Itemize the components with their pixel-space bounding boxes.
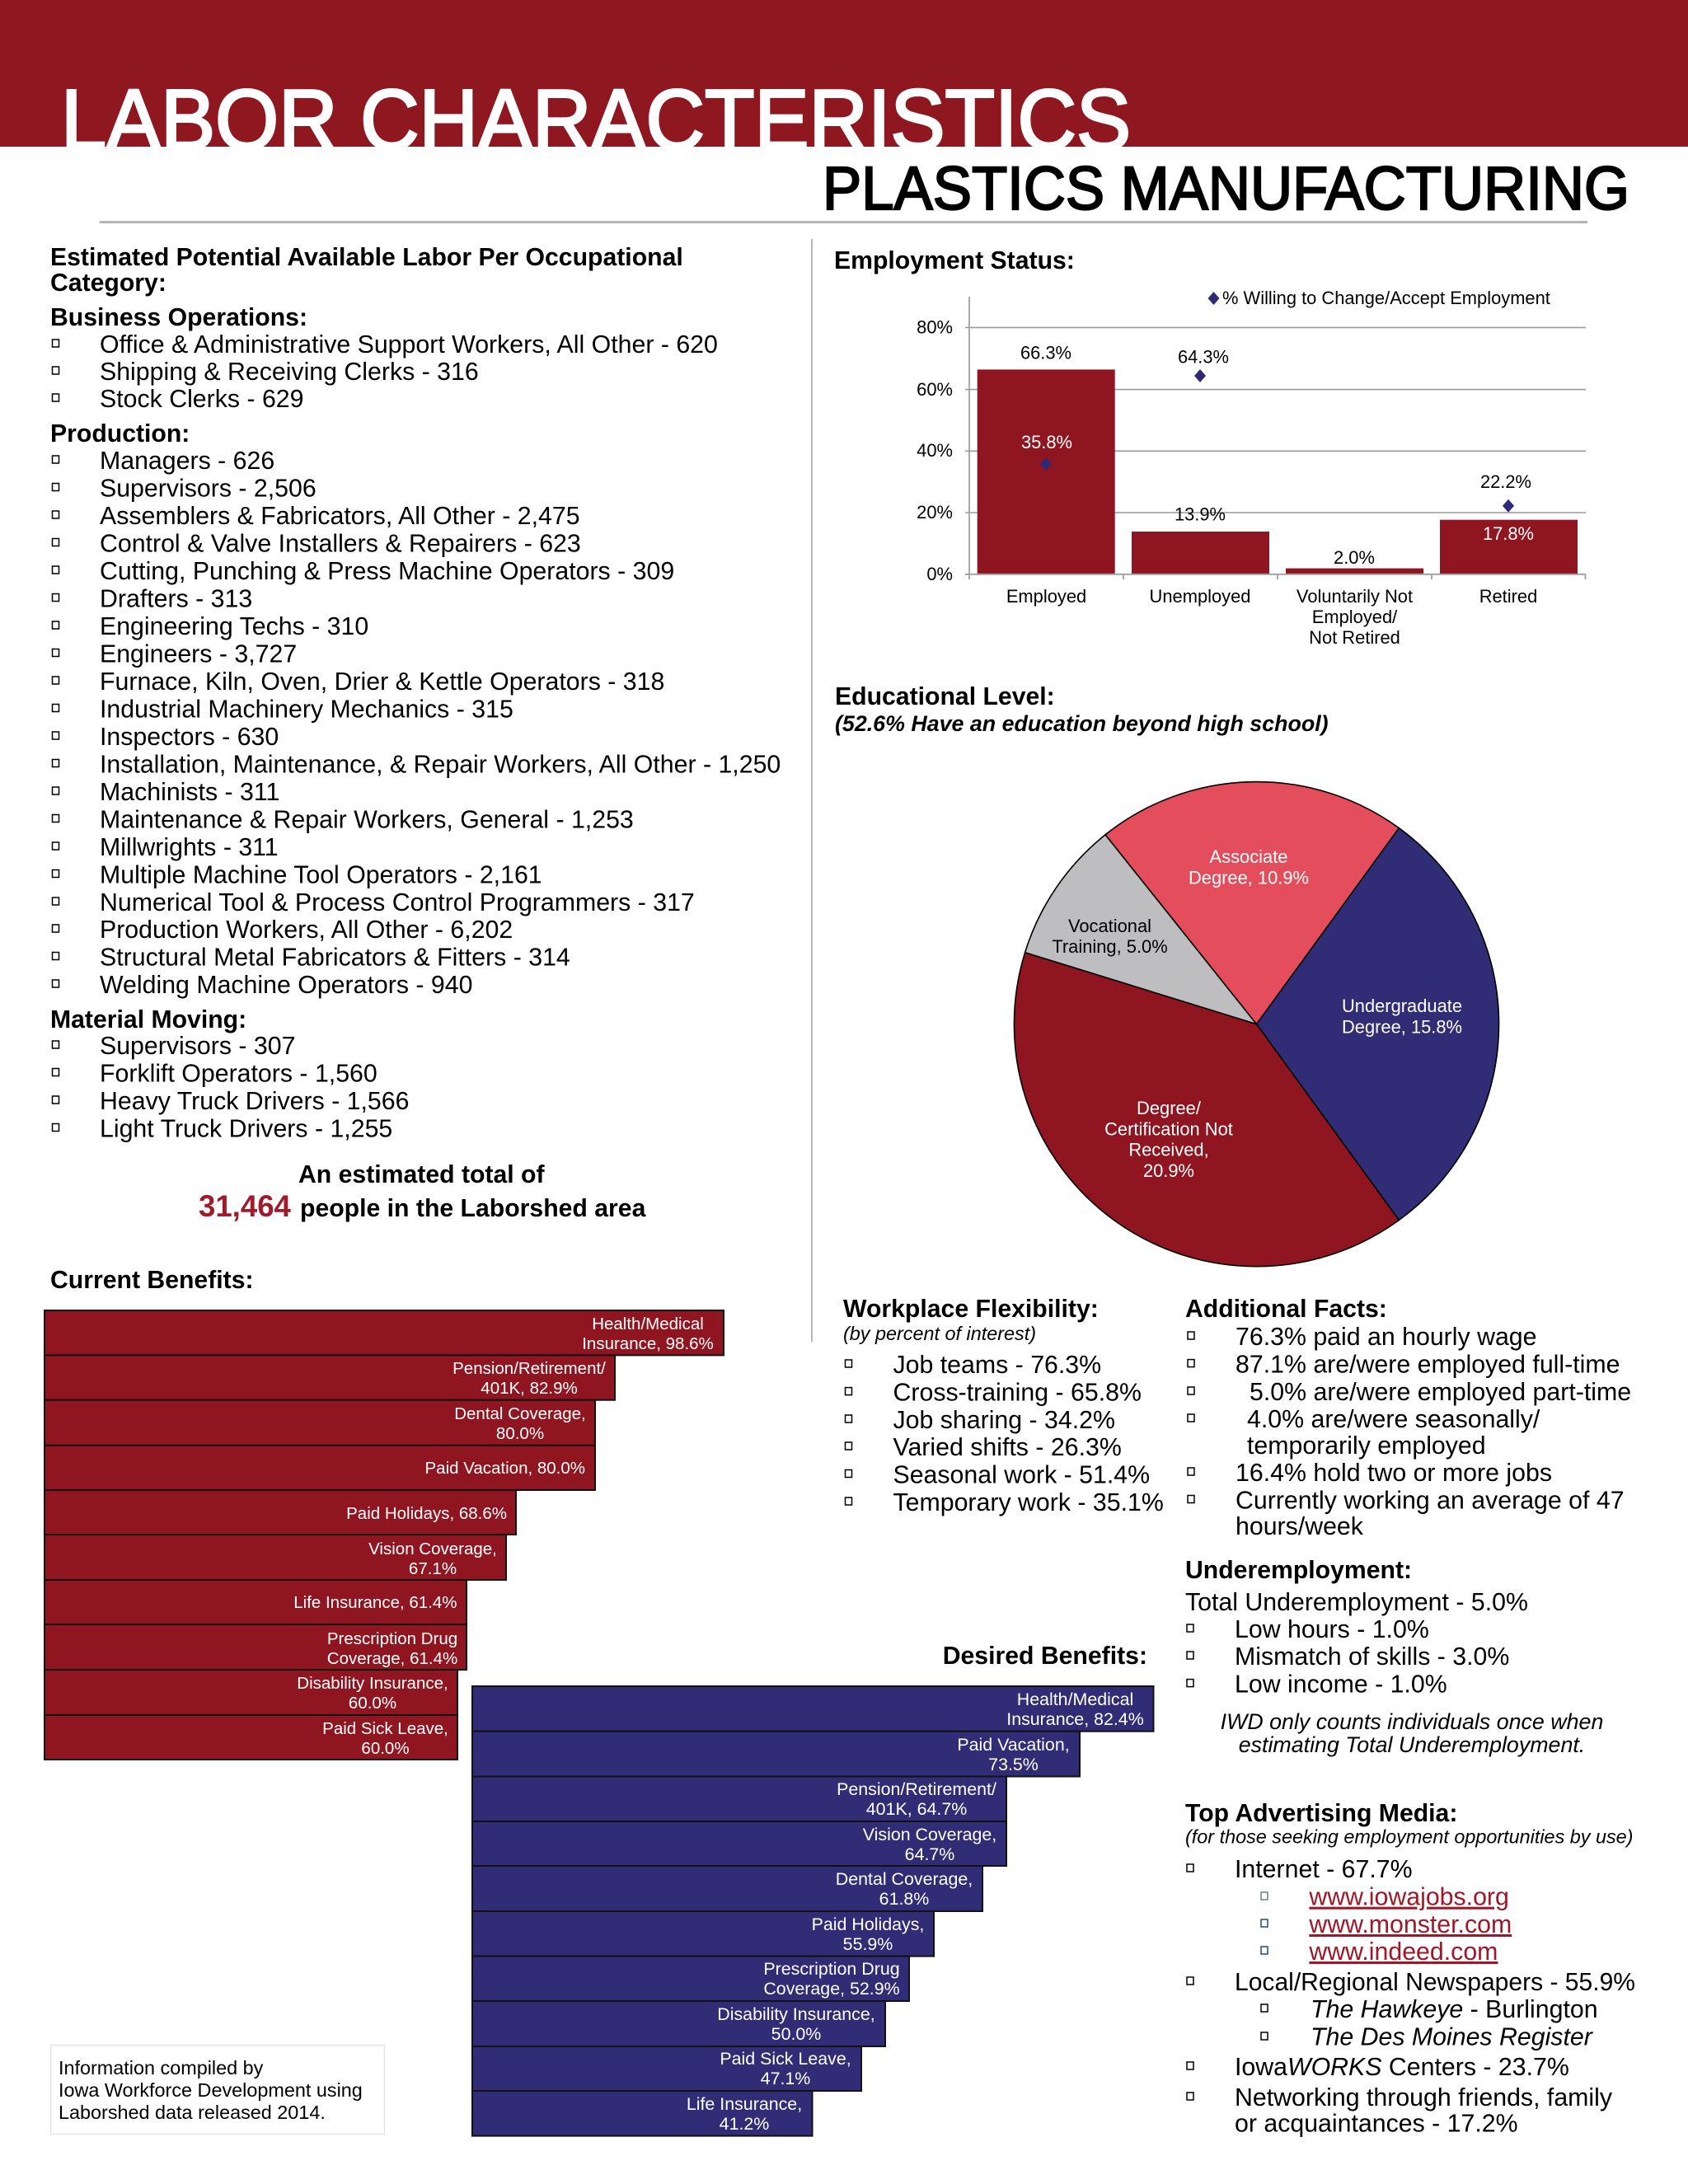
list: flexibility: Job teams - 76.3% [893,1352,1101,1379]
bar labels: Paid Sick Leave, [322,1719,448,1738]
list: flexibility: Seasonal work - 51.4% [893,1462,1150,1488]
list: production: Installation, Maintenance, & Repair Workers, All Other - 1,250 [100,752,781,778]
header band [0,0,1688,147]
bar labels: Insurance, 98.6% [582,1334,714,1353]
list: flexibility: Job sharing - 34.2% [893,1407,1115,1434]
list: underemployment: Total Underemployment - 5.0% [1185,1589,1528,1616]
y axis labels: 20% [917,502,953,523]
list: additional facts: 76.3% paid an hourly wage [1236,1324,1537,1351]
y axis labels [917,316,953,584]
y axis labels: 80% [917,316,953,338]
heading: production: Production: [50,420,190,448]
panel: workplace flexibility [843,1296,1164,1516]
y axis labels: 60% [917,379,953,400]
list: production: Assemblers & Fabricators, All Other - 2,475 [100,503,580,530]
heading: underemployment: Underemployment: [1185,1557,1412,1584]
list: media: www.iowajobs.org [1308,1884,1509,1911]
list: business operations: Office & Administrative Support Workers, All Other - 620 [100,331,718,359]
heading: educational level: Educational Level: [835,683,1055,710]
y axis labels: 40% [917,440,953,461]
value labels: 2.0% [1334,547,1375,568]
list: production: Production Workers, All Other - 6,202 [100,916,513,944]
bar labels: 60.0% [349,1694,396,1713]
bars [978,369,1578,574]
list: production: Structural Metal Fabricators & Fitters - 314 [100,944,570,971]
value labels: 64.3% [1178,346,1229,368]
list: flexibility: Temporary work - 35.1% [893,1489,1164,1516]
pie labels: Degree, 10.9% [1189,868,1309,888]
list: additional facts: hours/week [1236,1513,1364,1540]
pie labels: Certification Not [1104,1118,1233,1139]
list: production: Supervisors - 2,506 [100,475,316,503]
category labels: Voluntarily Not [1296,586,1413,607]
y axis labels: 0% [926,564,953,584]
bar labels: 50.0% [771,2024,821,2044]
axes [965,297,1586,579]
list: production: Engineers - 3,727 [100,641,297,668]
list: media: Internet - 67.7% [1235,1856,1413,1883]
bar labels: Health/Medical [592,1315,704,1333]
list: production [53,448,781,999]
pie labels [1052,846,1462,1181]
bar labels: 401K, 64.7% [866,1799,967,1819]
panel: top advertising media [1185,1800,1635,2138]
list: production: Engineering Techs - 310 [100,613,368,640]
heading: estimated potential available labor: Estimated Potential Available Labor Per Occupational [50,244,683,271]
subtitle: Plastics Manufacturing: PLASTICS MANUFACTURING [823,154,1629,223]
list: underemployment: Low income - 1.0% [1235,1671,1447,1699]
pie labels: Vocational [1068,916,1151,936]
category labels: Employed [1006,586,1086,607]
list: production: Inspectors - 630 [100,724,279,751]
bar labels: 80.0% [496,1424,544,1443]
list: additional facts: 16.4% hold two or more jobs [1236,1460,1552,1487]
bar labels: Disability Insurance, [297,1674,448,1693]
heading: workplace flexibility: Workplace Flexibility: [843,1296,1099,1323]
list: production: Managers - 626 [100,448,274,475]
category labels: Retired [1479,586,1537,607]
bar labels: Coverage, 61.4% [327,1649,457,1668]
list: underemployment: Mismatch of skills - 3.0% [1235,1643,1509,1671]
bar labels: Pension/Retirement/ [452,1359,606,1378]
bar labels: 41.2% [720,2114,769,2134]
list: business operations: Shipping & Receiving Clerks - 316 [100,359,479,386]
list: production: Furnace, Kiln, Oven, Drier & Kettle Operators - 318 [100,668,664,696]
heading: top advertising media: Top Advertising Media: [1185,1800,1457,1827]
list: media [1187,1856,1635,2138]
value labels: 22.2% [1480,471,1531,492]
legend: % Willing to Change/Accept Employment [1222,288,1550,308]
list: underemployment [1185,1589,1528,1699]
bar labels [687,1690,1144,2134]
callout: estimated total: people in the Laborshed area [300,1195,646,1222]
pie labels: Associate [1210,846,1287,867]
panel: employment status [834,247,1586,648]
panel: additional facts [1185,1296,1631,1540]
list: material moving: Forklift Operators - 1,560 [100,1060,377,1088]
list: underemployment: Low hours - 1.0% [1235,1616,1429,1643]
bar labels: Paid Vacation, [957,1735,1070,1755]
list: business operations [53,331,718,413]
bar chart: employment status [917,288,1586,648]
bar labels: Dental Coverage, [836,1869,973,1889]
list: media: Networking through friends, family [1235,2084,1613,2111]
bar labels: Prescription Drug [763,1959,900,1979]
bar labels: Vision Coverage, [863,1825,996,1844]
list: additional facts: Currently working an average of 47 [1236,1487,1625,1515]
pie labels: Undergraduate [1342,996,1462,1016]
list: production: Multiple Machine Tool Operators - 2,161 [100,862,542,888]
source note box [51,2046,384,2135]
bar labels: Life Insurance, 61.4% [293,1593,457,1612]
value labels: 66.3% [1020,342,1071,363]
subheading: by percent of interest: (by percent of interest) [843,1323,1036,1344]
note: IWD counting [1221,1709,1603,1757]
heading: business operations: Business Operations: [50,304,307,331]
bar labels: 64.7% [905,1844,954,1864]
list: flexibility: Cross-training - 65.8% [893,1380,1142,1407]
list: production: Cutting, Punching & Press Machine Operators - 309 [100,558,674,585]
willingness diamonds [1040,369,1514,513]
value labels: 35.8% [1021,432,1072,452]
list: media: Local/Regional Newspapers - 55.9% [1235,1969,1635,1996]
source note box: Information compiled by [59,2057,264,2079]
bar labels: 73.5% [988,1755,1039,1774]
list: additional facts: 4.0% are/were seasonally/ [1247,1406,1540,1433]
pie labels: Degree/ [1137,1098,1202,1118]
list: flexibility: Varied shifts - 26.3% [893,1434,1122,1461]
list: material moving: Heavy Truck Drivers - 1,566 [100,1088,409,1115]
bar chart: current benefits [45,1310,724,1760]
title: Labor Characteristics: LABOR CHARACTERISTICS [61,73,1131,168]
pie labels: Received, [1128,1140,1209,1160]
list: media: IowaWORKS Centers - 23.7% [1235,2054,1569,2081]
list: business operations: Stock Clerks - 629 [100,386,304,413]
heading: current benefits: Current Benefits: [50,1267,254,1294]
bar labels: 67.1% [409,1559,457,1578]
bar labels: 55.9% [843,1934,893,1954]
list: production: Numerical Tool & Process Control Programmers - 317 [100,889,695,916]
heading: estimated potential available labor: Category: [50,269,166,297]
list: media: The Hawkeye - Burlington [1311,1996,1598,2023]
list: flexibility [846,1352,1164,1516]
callout: estimated total: An estimated total of [298,1161,545,1188]
panel: labor per occupational category [50,244,781,1223]
bar labels: Paid Holidays, [812,1915,924,1934]
bar labels [293,1315,714,1758]
list: media: or acquaintances - 17.2% [1235,2111,1518,2138]
category labels [1006,586,1537,648]
note: IWD counting: estimating Total Underemployment. [1239,1732,1585,1757]
bar labels: 61.8% [879,1889,929,1909]
pie labels: Degree, 15.8% [1342,1017,1462,1038]
list: media: The Des Moines Register [1311,2024,1594,2051]
pie chart: education [1014,782,1499,1267]
list: material moving: Light Truck Drivers - 1,255 [100,1116,392,1142]
bar labels: Pension/Retirement/ [837,1779,996,1799]
list: production: Millwrights - 311 [100,834,279,861]
list: additional facts: temporarily employed [1247,1432,1486,1460]
list: production: Machinists - 311 [100,779,279,806]
list: additional facts [1188,1324,1631,1540]
value labels: 17.8% [1483,523,1534,544]
bar labels: Prescription Drug [327,1629,457,1648]
source note box: Laborshed data released 2014. [59,2102,326,2123]
bar labels: Paid Sick Leave, [720,2049,851,2069]
heading: desired benefits: Desired Benefits: [943,1643,1147,1670]
subheading: media note: (for those seeking employment opportunities by use) [1185,1826,1633,1848]
subheading: education note: (52.6% Have an education beyond high school) [835,711,1329,736]
list: material moving: Supervisors - 307 [100,1033,295,1060]
list: additional facts: 5.0% are/were employed part-time [1250,1379,1631,1406]
value labels: 13.9% [1175,504,1226,524]
value labels [1020,342,1534,568]
list: production: Maintenance & Repair Workers, General - 1,253 [100,806,634,834]
bar labels: Life Insurance, [687,2094,802,2114]
category labels: Unemployed [1150,586,1250,607]
heading: employment status: Employment Status: [834,247,1075,274]
heading: estimated potential available labor [50,244,683,297]
note: IWD counting: IWD only counts individuals once when [1221,1709,1603,1734]
callout: estimated total [199,1161,646,1223]
panel: current benefits [45,1267,724,1760]
pie labels: Training, 5.0% [1052,936,1168,957]
panel: desired benefits [472,1643,1154,2136]
bar labels: Disability Insurance, [717,2004,875,2024]
bar labels: Dental Coverage, [454,1404,586,1423]
bar labels: Vision Coverage, [368,1540,497,1558]
bar labels: Paid Vacation, 80.0% [425,1459,585,1478]
panel: underemployment [1185,1557,1603,1757]
bar labels: 60.0% [361,1739,410,1758]
list: additional facts: 87.1% are/were employed full-time [1236,1352,1620,1379]
category labels: Employed/ [1312,607,1398,627]
list: media: www.indeed.com [1308,1938,1498,1966]
bar labels: Insurance, 82.4% [1006,1709,1144,1729]
category labels: Not Retired [1309,627,1400,648]
callout: estimated total: 31,464 [199,1189,292,1223]
panel: educational level [835,683,1499,1267]
bar labels: Health/Medical [1017,1690,1133,1709]
list: media: www.monster.com [1308,1911,1512,1938]
bar labels: Paid Holidays, 68.6% [346,1504,507,1523]
bar labels: 401K, 82.9% [481,1379,578,1398]
list: production: Drafters - 313 [100,585,252,613]
heading: material moving: Material Moving: [50,1006,246,1033]
list: production: Welding Machine Operators - 940 [100,972,472,999]
bar labels: 47.1% [761,2069,810,2088]
heading: additional facts: Additional Facts: [1185,1296,1387,1323]
bar labels: Coverage, 52.9% [763,1979,900,1999]
list: production: Industrial Machinery Mechanics - 315 [100,696,513,724]
list: material moving [53,1033,409,1142]
source note box: Iowa Workforce Development using [59,2079,363,2101]
pie labels: 20.9% [1143,1160,1194,1181]
bar chart: desired benefits [472,1686,1154,2136]
list: production: Control & Valve Installers & Repairers - 623 [100,531,581,557]
